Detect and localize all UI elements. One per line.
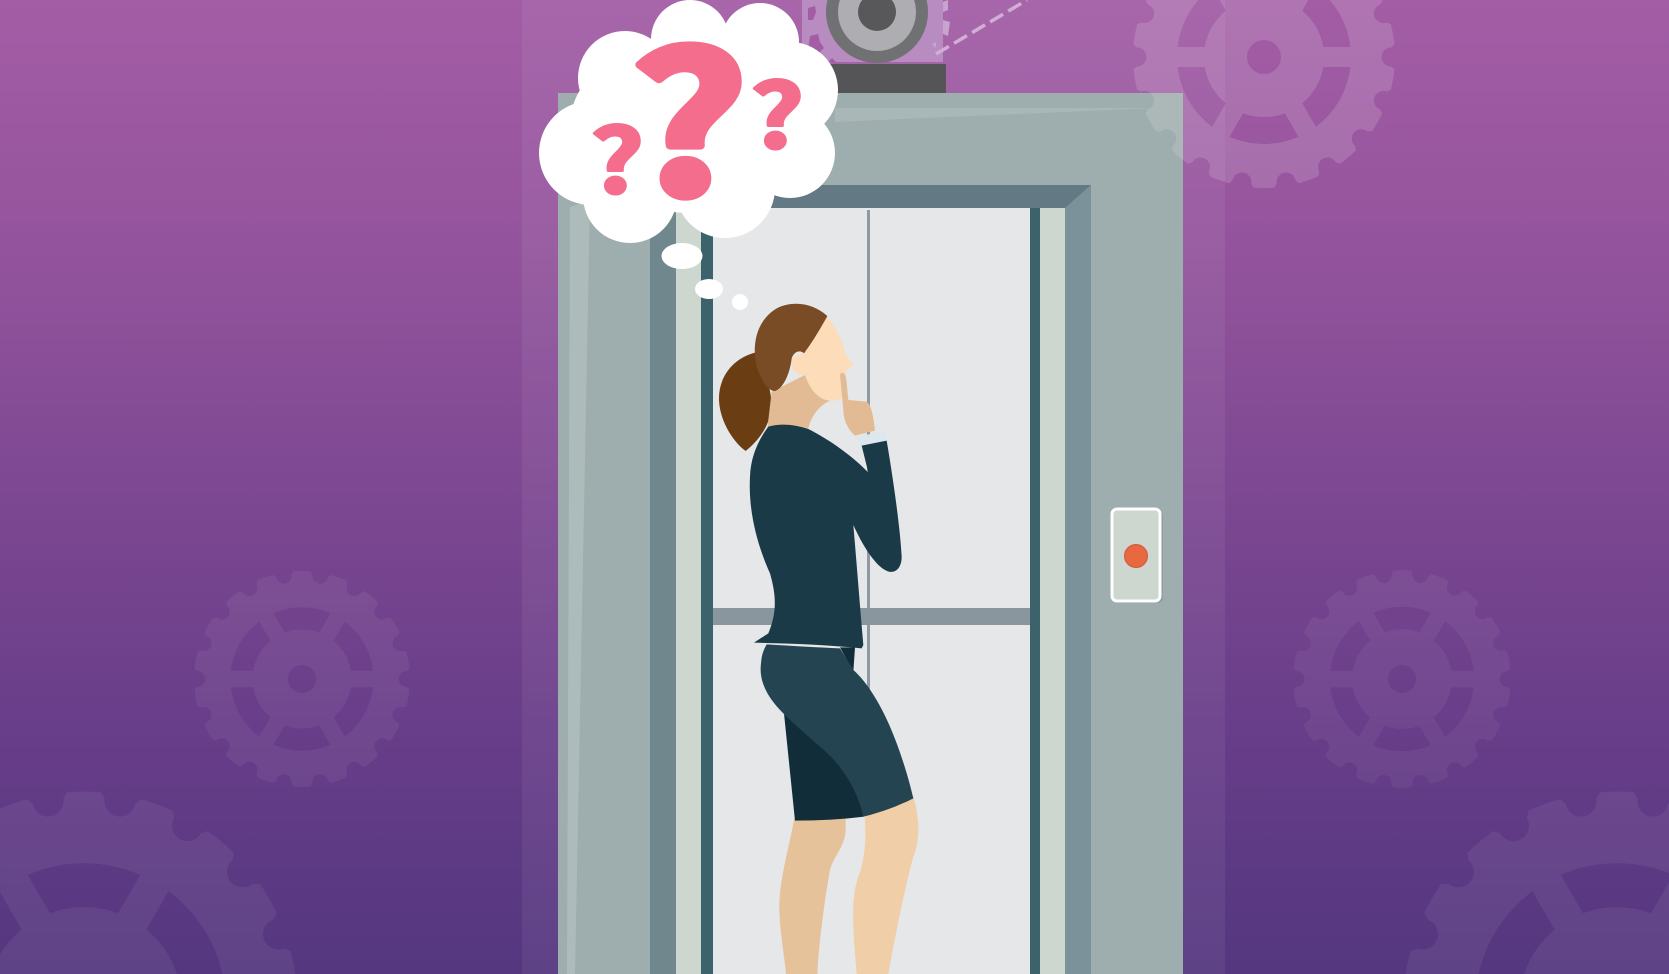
face	[791, 317, 853, 401]
door centre line	[867, 210, 870, 974]
door interior	[713, 208, 1030, 974]
elevator frame	[558, 93, 1183, 974]
thought cloud	[539, 0, 838, 310]
frame highlights	[835, 108, 1156, 122]
hand with raised finger	[840, 373, 875, 436]
motor base	[827, 64, 946, 93]
left question mark: ?	[590, 91, 644, 218]
neck	[767, 375, 830, 428]
skirt shadow	[784, 647, 864, 821]
gear: top right	[1134, 0, 1394, 188]
gear: bottom right	[1406, 792, 1669, 974]
elevator motor	[802, 0, 1027, 93]
top lintel	[650, 185, 1091, 208]
cuff	[856, 432, 888, 447]
front hair	[755, 304, 827, 391]
skirt	[761, 644, 913, 817]
left post	[650, 208, 713, 974]
dashed cable	[936, 0, 1027, 54]
pulley wheel	[826, 0, 928, 63]
gear: bottom left	[0, 792, 295, 974]
lighter wall band behind elevator	[522, 0, 1225, 974]
back leg	[779, 817, 846, 974]
front leg	[853, 797, 918, 974]
call button panel	[1112, 509, 1163, 603]
motor gear plate	[802, 0, 943, 62]
right post	[1030, 185, 1091, 974]
jacket	[750, 425, 902, 648]
cloud shape	[539, 0, 838, 243]
gear: middle left	[194, 571, 410, 787]
gear: middle right	[1294, 570, 1510, 788]
ponytail	[719, 353, 771, 451]
frame body	[558, 93, 1183, 974]
right question mark: ?	[750, 46, 804, 173]
plate notches	[808, 6, 836, 62]
upper body	[719, 304, 902, 648]
red button	[1124, 544, 1148, 568]
woman	[719, 304, 918, 974]
plate teeth	[932, 0, 950, 48]
lower body	[761, 644, 918, 974]
door rail	[713, 608, 1030, 625]
thought bubbles	[662, 243, 748, 310]
